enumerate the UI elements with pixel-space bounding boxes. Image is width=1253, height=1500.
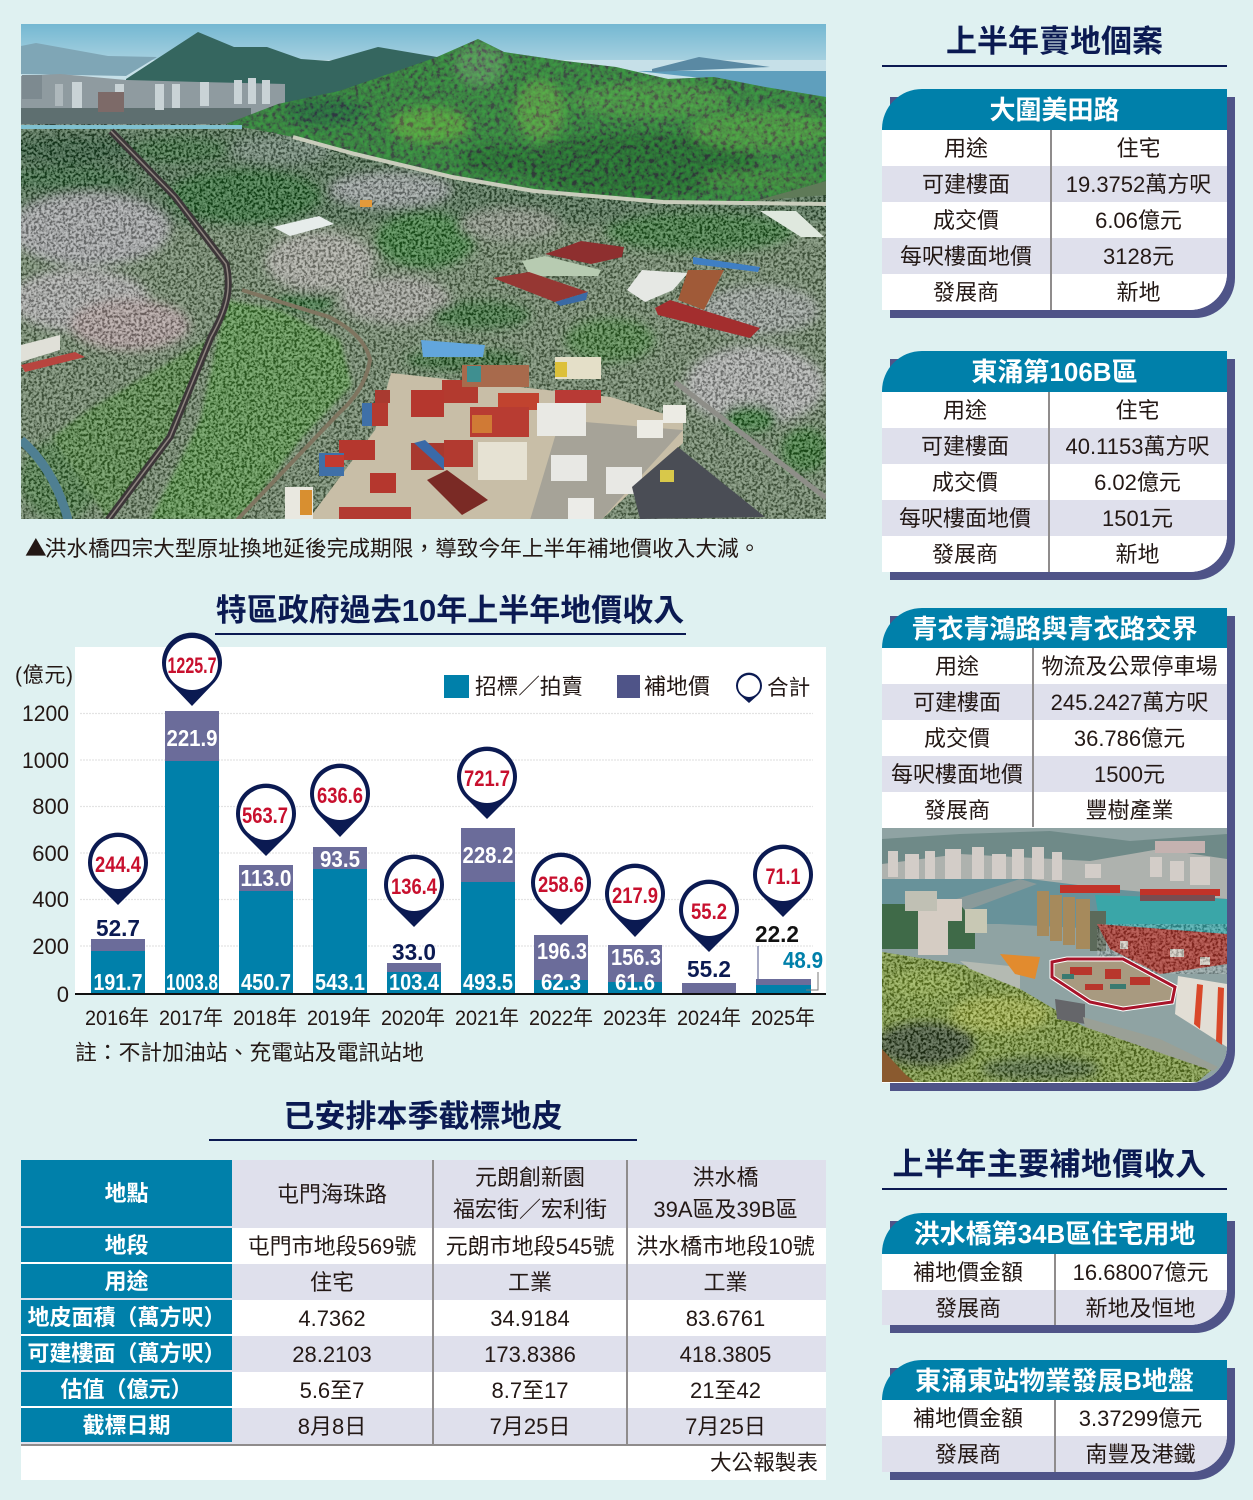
x axis labels: 2017年 — [159, 1007, 223, 1030]
row: closing date: 7月25日 — [490, 1414, 570, 1439]
panel: Tsing Yi site with photo: 每呎樓面地價 — [891, 762, 1023, 787]
total pins — [88, 633, 813, 952]
table: land tenders this quarter — [21, 1160, 826, 1480]
panel: Tsing Yi site with photo: 成交價 — [924, 726, 990, 751]
row: site area: 83.6761 — [686, 1306, 765, 1331]
photo: aerial view of Hung Shui Kiu — [21, 24, 826, 519]
x axis labels: 2022年 — [529, 1007, 593, 1030]
outside bar labels — [96, 915, 823, 982]
photo: Tsing Yi site — [882, 828, 1227, 1082]
panel: Tsing Yi site with photo: 可建樓面 — [913, 690, 1001, 715]
row: use: 工業 — [703, 1270, 748, 1295]
row: location: 元朗創新園 — [475, 1165, 585, 1190]
bar value labels: 228.2 — [462, 842, 514, 868]
row: valuation: 估值（億元） — [60, 1377, 192, 1402]
outside bar labels: 33.0 — [392, 939, 436, 965]
row: location: 洪水橋 — [692, 1165, 758, 1190]
row: location — [21, 1160, 826, 1228]
x axis labels — [85, 1007, 815, 1030]
heading: table title: 已安排本季截標地皮 — [284, 1099, 562, 1134]
row: location: 屯門海珠路 — [277, 1182, 387, 1207]
row: site area — [21, 1300, 765, 1336]
bar value labels: 450.7 — [241, 969, 291, 995]
pin totals: 1225.7 — [168, 653, 216, 678]
x axis labels: 2023年 — [603, 1007, 667, 1030]
panel header — [882, 89, 1227, 130]
panel: Tsing Yi site with photo: 發展商 — [924, 798, 990, 823]
panel: Tsing Yi site with photo: 豐樹產業 — [1085, 798, 1174, 823]
table source: 大公報製表 — [710, 1450, 818, 1475]
x axis labels: 2021年 — [455, 1007, 519, 1030]
panel: Tung Chung East Station Site B: 補地價金額 — [913, 1406, 1023, 1431]
pin totals: 136.4 — [391, 874, 438, 899]
row: floor area: 可建樓面（萬方呎） — [27, 1341, 226, 1366]
panel: Hung Shui Kiu Area 34B: 16.68007億元 — [1073, 1260, 1208, 1285]
panel header: 大圍美田路 — [989, 95, 1120, 125]
heading: main premium income: 上半年主要補地價收入 — [892, 1147, 1206, 1182]
outside bar labels: 22.2 — [755, 921, 799, 947]
panel: Tung Chung Area 106B: 40.1153萬方呎 — [1066, 434, 1209, 459]
panel: Tai Wai Mei Tin Road: 用途 — [944, 136, 988, 161]
bar value labels: 191.7 — [94, 969, 142, 995]
x axis labels: 2016年 — [85, 1007, 149, 1030]
row: lot: 屯門市地段569號 — [248, 1234, 416, 1259]
panel: Tung Chung Area 106B: 成交價 — [932, 470, 998, 495]
panel: Tai Wai Mei Tin Road: 3128元 — [1103, 244, 1174, 269]
y axis labels: 0 — [57, 982, 69, 1007]
row: closing date — [21, 1408, 826, 1446]
pin totals — [95, 653, 800, 924]
outside bar labels: 55.2 — [687, 956, 731, 982]
bar value labels: 221.9 — [166, 725, 218, 751]
row: floor area: 418.3805 — [680, 1342, 771, 1367]
row: floor area — [21, 1336, 826, 1372]
panel: Tsing Yi site with photo: 36.786億元 — [1074, 726, 1185, 751]
panel: Tai Wai Mei Tin Road: 6.06億元 — [1095, 208, 1182, 233]
row: closing date: 截標日期 — [82, 1413, 170, 1438]
row: location: 福宏街／宏利街 — [453, 1197, 607, 1222]
y axis labels: 400 — [32, 887, 69, 912]
panel header: 青衣青鴻路與青衣路交界 — [911, 614, 1198, 644]
bar value labels: 1003.8 — [166, 969, 218, 995]
panel: Tai Wai Mei Tin Road — [882, 89, 1235, 318]
panel: Tsing Yi site with photo: 物流及公眾停車場 — [1041, 654, 1218, 679]
pin totals: 721.7 — [464, 766, 510, 791]
bar chart: land revenue 2016-2025 — [15, 632, 826, 1065]
row: site area: 34.9184 — [490, 1306, 570, 1331]
row: valuation: 8.7至17 — [491, 1378, 569, 1403]
panel: Tung Chung East Station Site B: 南豐及港鐵 — [1085, 1442, 1196, 1467]
panel header: 東涌東站物業發展B地盤 — [915, 1366, 1194, 1396]
panel: Tai Wai Mei Tin Road: 住宅 — [1116, 136, 1160, 161]
pin totals: 563.7 — [242, 803, 288, 828]
legend: 合計 — [767, 675, 810, 700]
panel: Tsing Yi site with photo: 1500元 — [1094, 762, 1165, 787]
bar value labels: 156.3 — [611, 944, 661, 970]
row: closing date: 7月25日 — [685, 1414, 766, 1439]
panel: Tai Wai Mei Tin Road: 可建樓面 — [922, 172, 1010, 197]
row: valuation — [21, 1372, 761, 1408]
pin totals: 217.9 — [612, 883, 658, 908]
bar value labels: 61.6 — [615, 969, 655, 995]
row: valuation: 5.6至7 — [300, 1378, 364, 1403]
row: lot: 洪水橋市地段10號 — [636, 1234, 815, 1259]
panel: Hung Shui Kiu Area 34B: 新地及恒地 — [1085, 1296, 1196, 1321]
row: floor area: 28.2103 — [292, 1342, 372, 1367]
bar value labels: 113.0 — [240, 865, 292, 891]
x axis labels: 2018年 — [233, 1007, 297, 1030]
row: lot — [21, 1228, 815, 1264]
heading: chart title: 特區政府過去10年上半年地價收入 — [216, 593, 684, 628]
panel: Tung Chung Area 106B: 1501元 — [1102, 506, 1173, 531]
y axis labels: 200 — [32, 934, 69, 959]
y axis labels: 1000 — [22, 748, 69, 773]
bar value labels: 62.3 — [541, 969, 581, 995]
row: site area: 地皮面積（萬方呎） — [27, 1305, 226, 1330]
pin totals: 55.2 — [691, 899, 727, 924]
y axis labels: 1200 — [22, 701, 69, 726]
panel header: 東涌第106B區 — [971, 357, 1138, 387]
row: use: 用途 — [104, 1269, 148, 1294]
panel: Tung Chung East Station Site B: 3.37299億元 — [1079, 1406, 1202, 1431]
row: location: 39A區及39B區 — [653, 1197, 798, 1222]
panel: Tung Chung Area 106B: 住宅 — [1115, 398, 1160, 423]
row: use: 住宅 — [310, 1270, 354, 1295]
panel: Tung Chung Area 106B — [882, 351, 1235, 580]
panel: Tung Chung Area 106B: 每呎樓面地價 — [899, 506, 1031, 531]
row: lot: 地段 — [104, 1233, 148, 1258]
panel header: 洪水橋第34B區住宅用地 — [914, 1219, 1195, 1249]
outside bar labels: 52.7 — [96, 915, 140, 941]
panel: Tung Chung East Station Site B — [882, 1360, 1235, 1480]
panel: Tai Wai Mei Tin Road: 每呎樓面地價 — [900, 244, 1032, 269]
x axis labels: 2024年 — [677, 1007, 741, 1030]
bar value labels: 196.3 — [537, 938, 587, 964]
pin totals: 258.6 — [538, 872, 584, 897]
x axis labels: 2025年 — [751, 1007, 815, 1030]
legend: 補地價 — [644, 674, 710, 699]
legend: 招標／拍賣 — [475, 674, 583, 699]
photo caption: ▲洪水橋四宗大型原址換地延後完成期限，導致今年上半年補地價收入大減。 — [25, 532, 760, 563]
outside bar labels: 48.9 — [783, 947, 823, 973]
bar value labels: 493.5 — [463, 969, 513, 995]
x axis labels: 2020年 — [381, 1007, 445, 1030]
panel: Tai Wai Mei Tin Road: 發展商 — [933, 280, 999, 305]
row: closing date: 8月8日 — [298, 1414, 366, 1439]
pin totals: 71.1 — [766, 864, 800, 889]
row: valuation: 21至42 — [690, 1378, 761, 1403]
panel: Tung Chung Area 106B: 發展商 — [932, 542, 998, 567]
panel: Hung Shui Kiu Area 34B: 發展商 — [935, 1296, 1001, 1321]
bar value labels: 93.5 — [320, 846, 360, 872]
chart footnote: 註：不計加油站、充電站及電訊站地 — [75, 1040, 424, 1065]
panel: Tai Wai Mei Tin Road: 成交價 — [933, 208, 999, 233]
panel header — [882, 1213, 1227, 1254]
y axis labels — [15, 664, 73, 1007]
row: use: 工業 — [508, 1270, 552, 1295]
bar value labels — [94, 725, 661, 995]
x axis labels: 2019年 — [307, 1007, 371, 1030]
panel header — [882, 1360, 1227, 1400]
row: site area: 4.7362 — [298, 1306, 366, 1331]
panel: Tung Chung Area 106B: 可建樓面 — [921, 434, 1009, 459]
panel header — [882, 351, 1227, 392]
stacked bars — [91, 711, 811, 994]
panel: Tung Chung Area 106B: 新地 — [1115, 542, 1160, 567]
legend — [444, 673, 810, 703]
panel: Hung Shui Kiu Area 34B: 補地價金額 — [913, 1260, 1023, 1285]
bar value labels: 543.1 — [315, 969, 365, 995]
panel: Tsing Yi site with photo: 245.2427萬方呎 — [1051, 690, 1208, 715]
row: use — [21, 1264, 826, 1300]
panel: Hung Shui Kiu Area 34B — [882, 1213, 1235, 1333]
panel: Tung Chung Area 106B: 6.02億元 — [1094, 470, 1181, 495]
panel: Tai Wai Mei Tin Road: 新地 — [1116, 280, 1160, 305]
y axis labels: 600 — [32, 841, 69, 866]
row: floor area: 173.8386 — [484, 1342, 576, 1367]
bar value labels: 103.4 — [389, 969, 439, 995]
heading: land sale cases: 上半年賣地個案 — [946, 24, 1163, 59]
pin totals: 244.4 — [95, 852, 142, 877]
row: location: 地點 — [104, 1181, 148, 1206]
panel: Tsing Yi site with photo — [882, 608, 1235, 1091]
panel: Tung Chung East Station Site B: 發展商 — [935, 1442, 1001, 1467]
y axis labels: (億元) — [15, 664, 73, 687]
row: lot: 元朗市地段545號 — [446, 1234, 614, 1259]
pin totals: 636.6 — [317, 783, 363, 808]
panel: Tung Chung Area 106B: 用途 — [943, 398, 987, 423]
panel: Tsing Yi site with photo: 用途 — [935, 654, 979, 679]
panel header — [882, 608, 1227, 648]
y axis labels: 800 — [32, 794, 69, 819]
panel: Tai Wai Mei Tin Road: 19.3752萬方呎 — [1066, 172, 1211, 197]
